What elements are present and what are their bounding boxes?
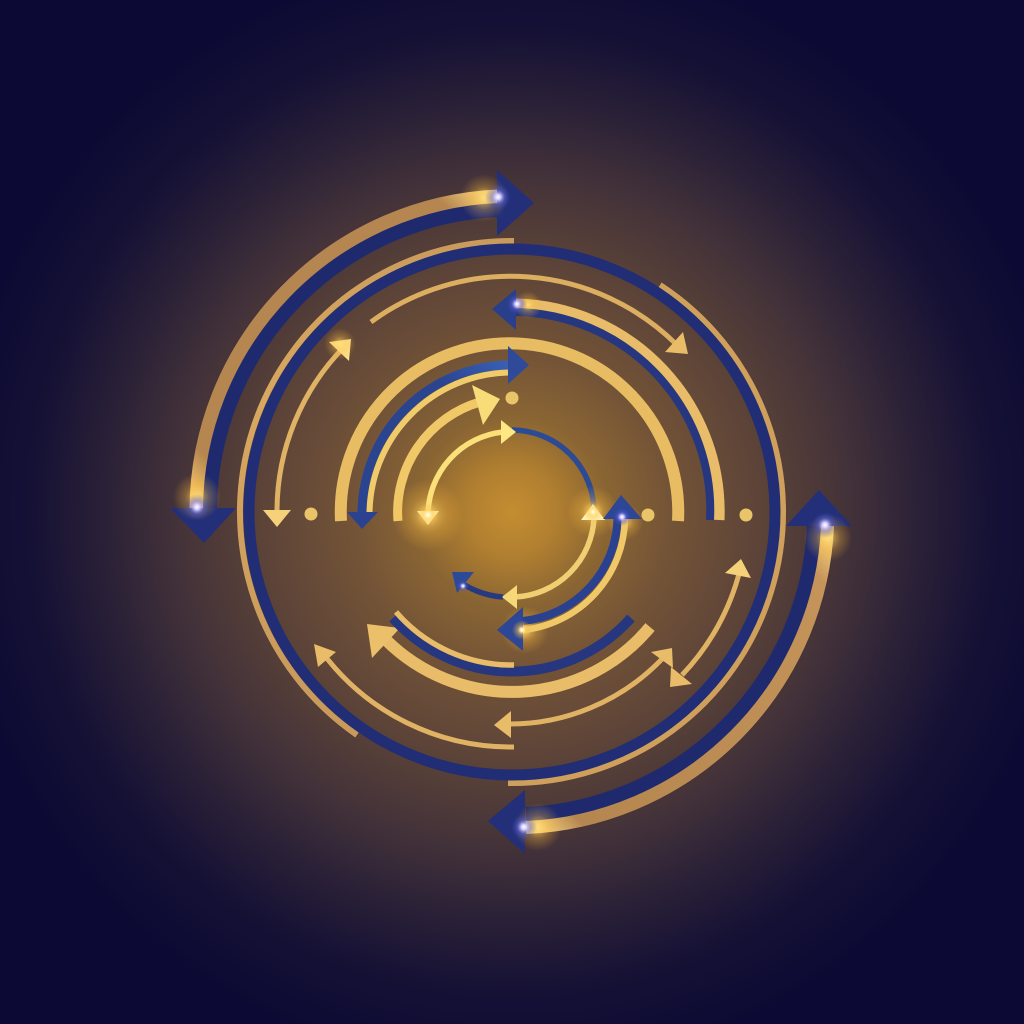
lower thin tan arc	[396, 612, 514, 665]
blue ring	[249, 249, 775, 775]
mid left arrow pair	[347, 346, 529, 529]
lower thick arrow	[367, 624, 650, 692]
thin top arrow	[371, 276, 688, 354]
inner lower yellow arrow	[502, 504, 605, 609]
icon: arrowhead up	[786, 490, 852, 526]
thin lower arrow	[494, 648, 673, 738]
upper right arrow pair	[492, 289, 719, 520]
outer bottom-right arrow pair	[488, 490, 852, 854]
soft glows	[173, 174, 852, 851]
inner yellow arc arrow	[417, 420, 516, 525]
thin upper-left arrow	[263, 339, 351, 527]
inner right arrow pair	[497, 495, 642, 651]
inner blue arc	[512, 430, 594, 512]
thin bottom-left arrow	[314, 644, 514, 747]
outer top-left arrow pair	[170, 170, 534, 543]
inner lower blue arrow	[452, 572, 503, 597]
yellow arrow	[398, 385, 500, 521]
dots	[304, 392, 752, 522]
thin tan ring segments	[240, 241, 783, 783]
lower blue arc	[393, 618, 631, 672]
large half ring	[341, 343, 678, 521]
thin right double arrow	[670, 559, 751, 687]
lights on arrow bases	[184, 184, 838, 840]
icon: arrowhead right	[497, 170, 534, 236]
